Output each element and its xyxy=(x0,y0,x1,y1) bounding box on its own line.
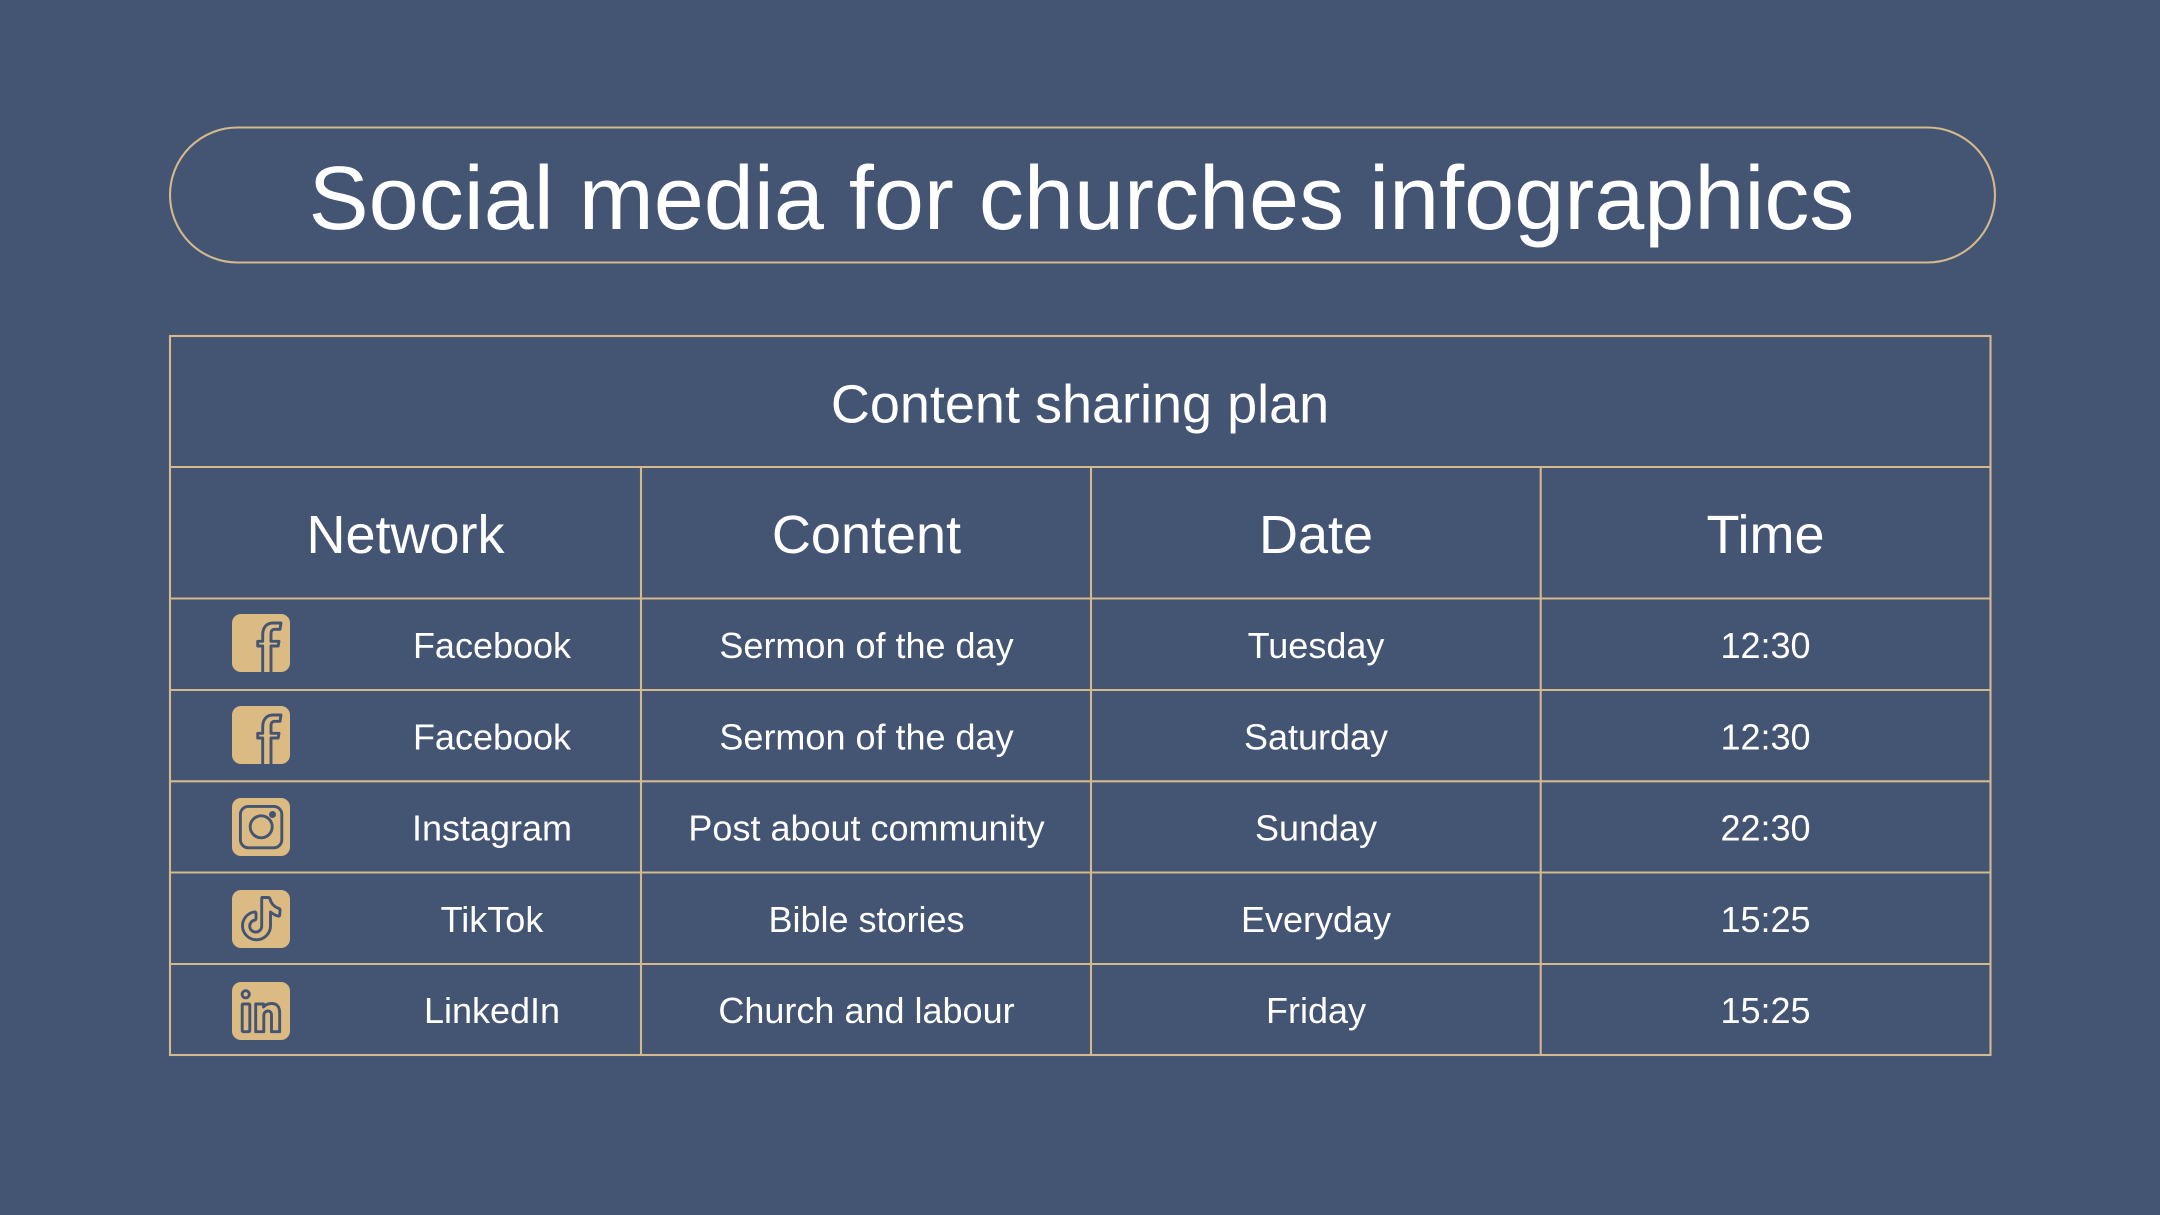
row: TikTok: Everyday xyxy=(1241,899,1391,940)
row: LinkedIn: Friday xyxy=(1266,990,1366,1031)
column headers: Time xyxy=(1706,505,1824,565)
row: Facebook Saturday: Saturday xyxy=(1244,716,1388,757)
row: Facebook Tuesday: 12:30 xyxy=(1720,625,1811,666)
icon: tiktok xyxy=(232,890,290,948)
row: Instagram: Sunday xyxy=(1255,808,1377,849)
row: TikTok: Bible stories xyxy=(768,899,965,940)
row: LinkedIn: 15:25 xyxy=(1720,990,1811,1031)
row: Facebook Saturday: 12:30 xyxy=(1720,716,1811,757)
icon: facebook xyxy=(232,706,290,764)
row: Facebook Tuesday xyxy=(232,614,1811,672)
title pill xyxy=(170,128,1995,262)
row: TikTok: TikTok xyxy=(441,899,544,940)
row: Facebook Tuesday: Sermon of the day xyxy=(719,625,1014,666)
column headers xyxy=(306,505,1824,565)
table grid xyxy=(170,336,1990,1055)
row: Instagram xyxy=(232,798,1811,856)
row: LinkedIn xyxy=(232,982,1811,1040)
row: TikTok xyxy=(232,890,1811,948)
row: Instagram: Post about community xyxy=(688,808,1045,849)
row: LinkedIn: LinkedIn xyxy=(424,990,560,1031)
row: Instagram: Instagram xyxy=(412,808,572,849)
table: content sharing plan xyxy=(170,336,1990,1055)
row: Facebook Saturday xyxy=(232,706,1811,764)
table heading: Content sharing plan xyxy=(831,374,1329,434)
row: TikTok: 15:25 xyxy=(1720,899,1811,940)
title: Social media for churches infographics xyxy=(309,149,1854,249)
icon: instagram xyxy=(232,798,290,856)
column headers: Date xyxy=(1259,505,1373,565)
icon: facebook xyxy=(232,614,290,672)
row: Instagram: 22:30 xyxy=(1720,808,1811,849)
icon: linkedin xyxy=(232,982,290,1040)
column headers: Network xyxy=(306,505,506,565)
row: Facebook Tuesday: Tuesday xyxy=(1248,625,1384,666)
row: LinkedIn: Church and labour xyxy=(718,990,1015,1031)
row: Facebook Tuesday: Facebook xyxy=(413,625,572,666)
row: Facebook Saturday: Facebook xyxy=(413,716,572,757)
column headers: Content xyxy=(772,505,961,565)
row: Facebook Saturday: Sermon of the day xyxy=(719,716,1014,757)
